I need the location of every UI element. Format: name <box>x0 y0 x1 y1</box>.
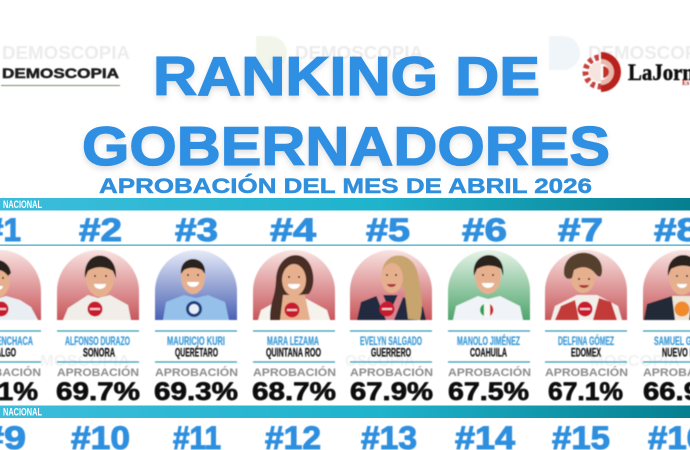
title: GOBERNADORES <box>82 115 610 177</box>
watermarks <box>2 36 690 370</box>
card 6: COAHUILA <box>470 348 507 360</box>
card 5 <box>350 250 433 406</box>
title: RANKING DE <box>153 45 540 107</box>
card 5: 67.9% <box>350 378 433 406</box>
logo: Demoscopia: DEMOSCOPIA <box>2 65 119 81</box>
rank numbers: first row: #2 <box>79 212 122 248</box>
card 2 <box>56 250 140 406</box>
card 3: MAURICIO KURI <box>167 336 225 348</box>
card 7: 67.1% <box>548 378 623 406</box>
card 7: APROBACIÓN <box>545 366 628 379</box>
band: top: NACIONAL <box>3 199 42 211</box>
card 3: APROBACIÓN <box>155 366 238 379</box>
card 1 <box>0 250 41 406</box>
card 2: ALFONSO DURAZO <box>65 336 130 348</box>
watermarks: DEMOSCOPIA <box>2 43 130 63</box>
watermarks: MOSCOPIA <box>40 353 130 370</box>
card 6 <box>448 250 531 406</box>
band: second <box>0 406 690 418</box>
card 2: APROBACIÓN <box>57 366 139 379</box>
card 7: DELFINA GÓMEZ <box>558 335 614 348</box>
rank numbers: first row: #3 <box>175 212 218 248</box>
card 4: 68.7% <box>252 378 336 406</box>
card 4: APROBACIÓN <box>253 366 336 379</box>
subtitle: APROBACIÓN DEL MES DE ABRIL 2026 <box>99 173 592 198</box>
band: top <box>0 198 690 211</box>
logo: Demoscopia <box>1 65 120 86</box>
card 5: APROBACIÓN <box>350 366 433 379</box>
rank numbers: first row: #8 <box>654 212 690 248</box>
card 2: SONORA <box>83 348 115 360</box>
title <box>82 45 610 177</box>
watermarks: DEMOSCOPIA <box>295 43 423 63</box>
rank numbers: first row: #4 <box>270 212 316 248</box>
watermarks: MOSCOPIA <box>590 353 680 370</box>
rank numbers: first row: #6 <box>462 212 507 248</box>
card 8 <box>643 250 690 406</box>
band: second: NACIONAL <box>3 406 42 418</box>
rank numbers: first row <box>0 212 690 248</box>
card 4: QUINTANA ROO <box>266 348 321 360</box>
card 6: APROBACIÓN <box>448 366 531 379</box>
card 4: MARA LEZAMA <box>267 336 319 348</box>
card 6: 67.5% <box>448 378 529 406</box>
card 4 <box>252 250 336 406</box>
card 3: 69.3% <box>154 378 238 406</box>
card 6: MANOLO JIMÉNEZ <box>457 335 520 348</box>
card 7 <box>545 250 628 406</box>
card 5: GUERRERO <box>371 348 411 360</box>
rank numbers: first row: #7 <box>558 212 603 248</box>
card 3: QUERÉTARO <box>175 346 218 360</box>
rank numbers: second row <box>0 420 690 450</box>
watermarks: OSCOPIA <box>345 353 415 370</box>
rank numbers: first row: #5 <box>366 212 410 248</box>
card 5: EVELYN SALGADO <box>360 336 422 348</box>
logo: La Jornada <box>586 52 690 92</box>
logo: La Jornada: Es <box>682 79 690 87</box>
card 3 <box>154 250 238 406</box>
card 2: 69.7% <box>56 378 140 406</box>
card 7: EDOMEX <box>571 348 601 360</box>
